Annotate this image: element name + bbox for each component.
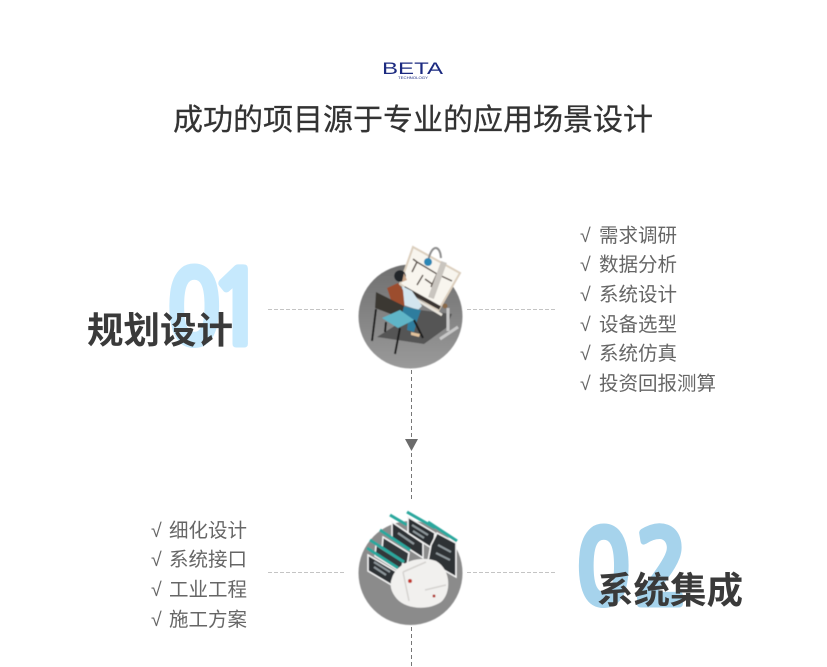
title: 成功的项目源于专业的应用场景设计 [173,104,653,137]
large number 01: 0 [166,259,221,360]
checklist: step 1: √ [580,284,591,306]
logo: BETA Technology: BETA [382,59,444,78]
checklist: step 1 [580,225,716,395]
checklist: step 1: 需求调研 [599,225,677,247]
arrow: continuation below step 2 [410,627,412,667]
icon: designer at drafting table [358,247,462,368]
large number 02 [576,519,689,620]
checklist: step 2: 系统接口 [169,549,247,571]
heading: 规划设计: 规划设计 [87,310,233,351]
checklist: step 1: √ [580,254,591,276]
checklist: step 2 [151,520,247,631]
checklist: step 2: √ [151,579,162,601]
icon: system integration screens and dome [358,512,462,625]
checklist: step 1: √ [580,343,591,365]
large number 01 [166,259,268,361]
large number 02: 2 [634,519,689,620]
checklist: step 1: 投资回报测算 [599,373,716,395]
large number 02: 0 [576,519,631,620]
checklist: step 1: 系统仿真 [599,343,677,365]
checklist: step 1: 设备选型 [599,314,677,336]
arrow: step 1 to step 2 [405,370,418,500]
heading: 系统集成: 系统集成 [597,570,743,611]
checklist: step 1: √ [580,225,591,247]
connector lines: step 1 [268,308,555,310]
checklist: step 2: 施工方案 [169,609,247,631]
checklist: step 1: 系统设计 [599,284,677,306]
checklist: step 2: √ [151,549,162,571]
checklist: step 2: √ [151,609,162,631]
checklist: step 2: √ [151,520,162,542]
large number 01: 1 [208,259,268,361]
connector lines: step 2 [268,572,555,574]
checklist: step 1: √ [580,314,591,336]
checklist: step 1: 数据分析 [599,254,677,276]
checklist: step 2: 细化设计 [169,520,247,542]
checklist: step 2: 工业工程 [169,579,247,601]
logo: BETA Technology [382,59,444,80]
checklist: step 1: √ [580,373,591,395]
logo: BETA Technology: TECHNOLOGY [398,75,428,80]
